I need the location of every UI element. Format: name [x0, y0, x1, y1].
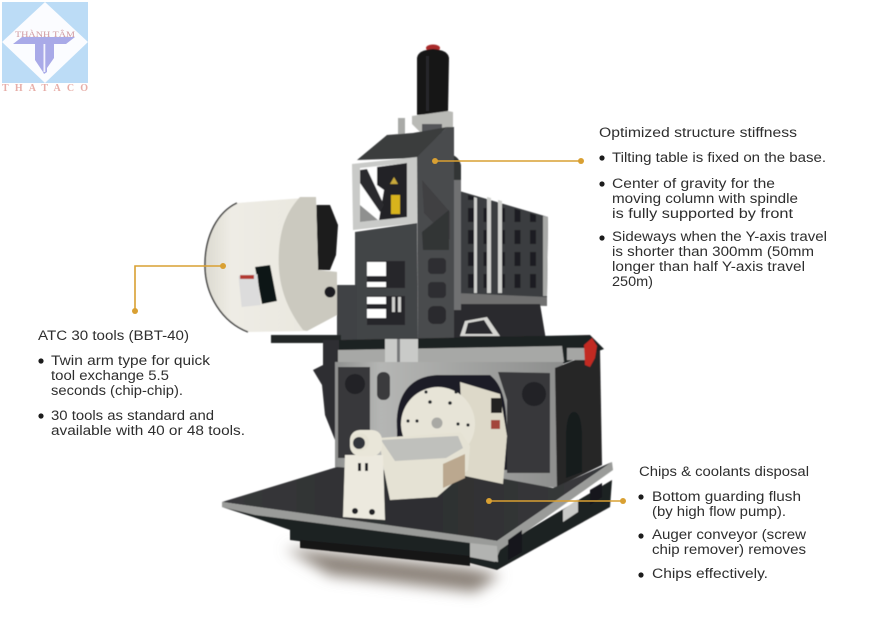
text block: chips and coolants disposal: Chips & coolants disposal: [639, 464, 809, 479]
text block: ATC 30 tools: available with 40 or 48 tools.: [51, 423, 245, 438]
text block: optimized structure stiffness: longer than half Y-axis travel: [612, 259, 805, 274]
text block: optimized structure stiffness: 250m): [612, 274, 653, 289]
text block: optimized structure stiffness: is fully supported by front: [612, 206, 793, 221]
text block: optimized structure stiffness: is shorter than 300mm (50mm: [612, 244, 814, 259]
text block: chips and coolants disposal: Chips effectively.: [652, 566, 768, 581]
spindle motor: [398, 44, 453, 136]
column body: [352, 127, 454, 347]
text block: ATC 30 tools: [38, 328, 245, 438]
text block: ATC 30 tools: ATC 30 tools (BBT-40): [38, 328, 189, 343]
logo: Thanh Tam Thataco: THATACO: [2, 83, 88, 94]
text block: chips and coolants disposal: [638, 464, 809, 581]
text block: optimized structure stiffness: [599, 125, 827, 289]
floor shadow: [285, 548, 500, 592]
ATC tool magazine: [205, 197, 357, 347]
text block: chips and coolants disposal: Auger conveyor (screw: [652, 527, 806, 542]
leader: structure stiffness: [432, 158, 584, 164]
logo: Thanh Tam Thataco: THÀNH TÂM: [15, 29, 76, 39]
text block: ATC 30 tools: 30 tools as standard and: [51, 408, 214, 423]
leader: chips disposal: [486, 498, 626, 504]
column windows: [367, 258, 446, 325]
text block: chips and coolants disposal: (by high flow pump).: [652, 504, 786, 519]
text block: ATC 30 tools: Twin arm type for quick: [51, 353, 210, 368]
rotary tilting table: [343, 382, 507, 520]
X-axis rail and base frame: [271, 335, 604, 488]
text block: chips and coolants disposal: Bottom guarding flush: [652, 489, 801, 504]
machine illustration: [205, 44, 613, 592]
text block: optimized structure stiffness: Tilting table is fixed on the base.: [612, 150, 826, 165]
text block: ATC 30 tools: seconds (chip-chip).: [51, 383, 183, 398]
chip pan base: [222, 462, 613, 570]
text block: ATC 30 tools: tool exchange 5.5: [51, 368, 169, 383]
text block: optimized structure stiffness: Sideways when the Y-axis travel: [612, 229, 827, 244]
text block: optimized structure stiffness: Optimized structure stiffness: [599, 125, 797, 140]
text block: optimized structure stiffness: moving column with spindle: [612, 191, 798, 206]
text block: chips and coolants disposal: chip remover) removes: [652, 542, 806, 557]
text block: optimized structure stiffness: Center of gravity for the: [612, 176, 775, 191]
leader: ATC: [132, 263, 226, 314]
rear moving column panel: [450, 155, 548, 347]
logo: Thanh Tam Thataco: [2, 2, 88, 94]
